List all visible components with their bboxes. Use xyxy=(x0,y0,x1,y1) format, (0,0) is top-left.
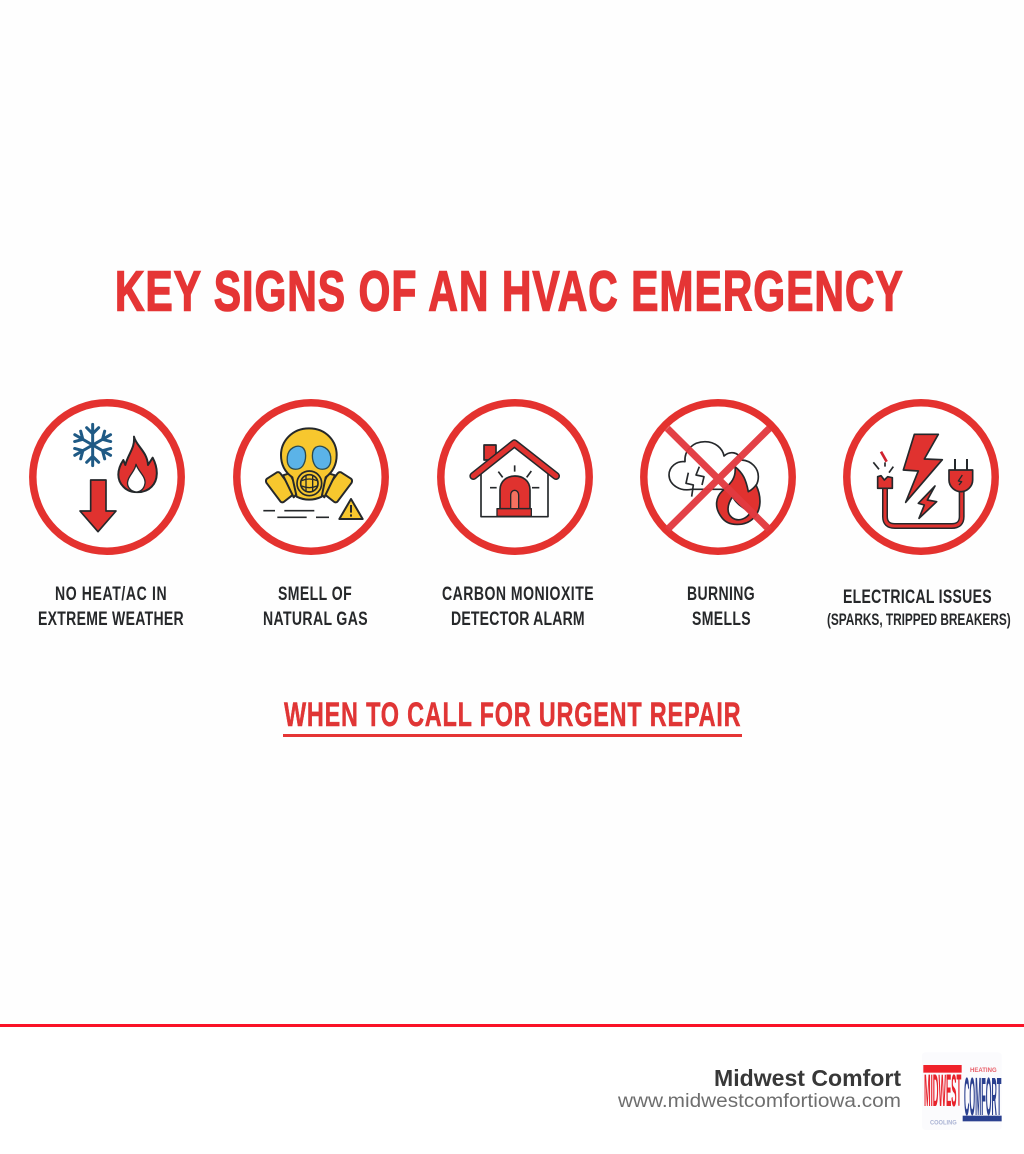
icon: down arrow xyxy=(80,480,116,532)
panel: burning smells xyxy=(644,403,792,630)
icon: house walls xyxy=(481,445,548,517)
label: EXTREME WEATHER xyxy=(38,608,184,630)
label xyxy=(442,583,594,630)
logo xyxy=(922,1052,1002,1130)
panel: electrical issues xyxy=(827,403,1011,630)
icon: flame xyxy=(717,467,760,524)
footer company text xyxy=(617,1065,901,1112)
icon: roof xyxy=(473,443,556,476)
panel: carbon monoxide detector alarm xyxy=(441,403,594,630)
logo: MIDWEST xyxy=(924,1066,961,1117)
logo: COOLING xyxy=(930,1120,957,1127)
icon: gas lines xyxy=(263,511,329,517)
label: (SPARKS, TRIPPED BREAKERS) xyxy=(827,611,1011,630)
label: BURNING xyxy=(687,583,755,605)
icon: mask head xyxy=(281,428,337,500)
icon: canisters xyxy=(266,472,352,502)
label: DETECTOR ALARM xyxy=(451,608,585,630)
icon: red ring xyxy=(644,403,792,551)
icon: eye lenses xyxy=(287,446,331,469)
icon: red ring xyxy=(847,403,995,551)
icon: warning triangle xyxy=(339,499,363,519)
icon: alarm rays xyxy=(490,465,539,488)
icon: red ring xyxy=(441,403,589,551)
icon: flame xyxy=(118,437,157,492)
label xyxy=(827,586,1011,630)
panel: no heat or AC in extreme weather xyxy=(33,403,184,630)
icon: large lightning bolt xyxy=(903,434,942,502)
icon: red ring xyxy=(33,403,181,551)
icon: siren xyxy=(500,476,530,509)
icon: sparks xyxy=(873,462,893,473)
label: ELECTRICAL ISSUES xyxy=(843,586,992,608)
icon: small lightning bolt xyxy=(918,486,937,518)
label xyxy=(263,583,368,630)
icon: chimney xyxy=(484,445,496,460)
label: CARBON MONIOXITE xyxy=(442,583,594,605)
footer company text: www.midwestcomfortiowa.com xyxy=(617,1090,901,1112)
icon: snow, flame and down arrow xyxy=(72,424,157,532)
label: SMELLS xyxy=(692,608,751,630)
icon: red cross xyxy=(667,428,769,530)
icon: house with siren xyxy=(473,443,556,517)
label: SMELL OF xyxy=(278,583,352,605)
icon: broken cable end xyxy=(878,476,892,488)
icon: smoke cloud xyxy=(669,442,758,492)
logo: HEATING xyxy=(970,1067,997,1074)
subheading with underline: WHEN TO CALL FOR URGENT REPAIR xyxy=(284,696,741,734)
icon: cable xyxy=(885,488,962,526)
footer company text: Midwest Comfort xyxy=(714,1065,901,1091)
label xyxy=(38,583,184,630)
label xyxy=(687,583,755,630)
icon: gas mask with warning xyxy=(263,428,363,519)
icon: plug xyxy=(955,459,967,470)
icon: bolts, cable and plug xyxy=(873,434,973,526)
title: KEY SIGNS OF AN HVAC EMERGENCY xyxy=(115,260,903,323)
icon: snowflake xyxy=(72,424,114,466)
icon: red ring xyxy=(237,403,385,551)
icon: lightning squiggles xyxy=(686,467,704,497)
label: NO HEAT/AC IN xyxy=(55,583,167,605)
icon: crossed-out cloud and flame xyxy=(667,428,769,530)
footer bar xyxy=(0,1024,1024,1154)
label: NATURAL GAS xyxy=(263,608,368,630)
icon: filter xyxy=(297,471,322,496)
panel: smell of natural gas xyxy=(237,403,385,630)
